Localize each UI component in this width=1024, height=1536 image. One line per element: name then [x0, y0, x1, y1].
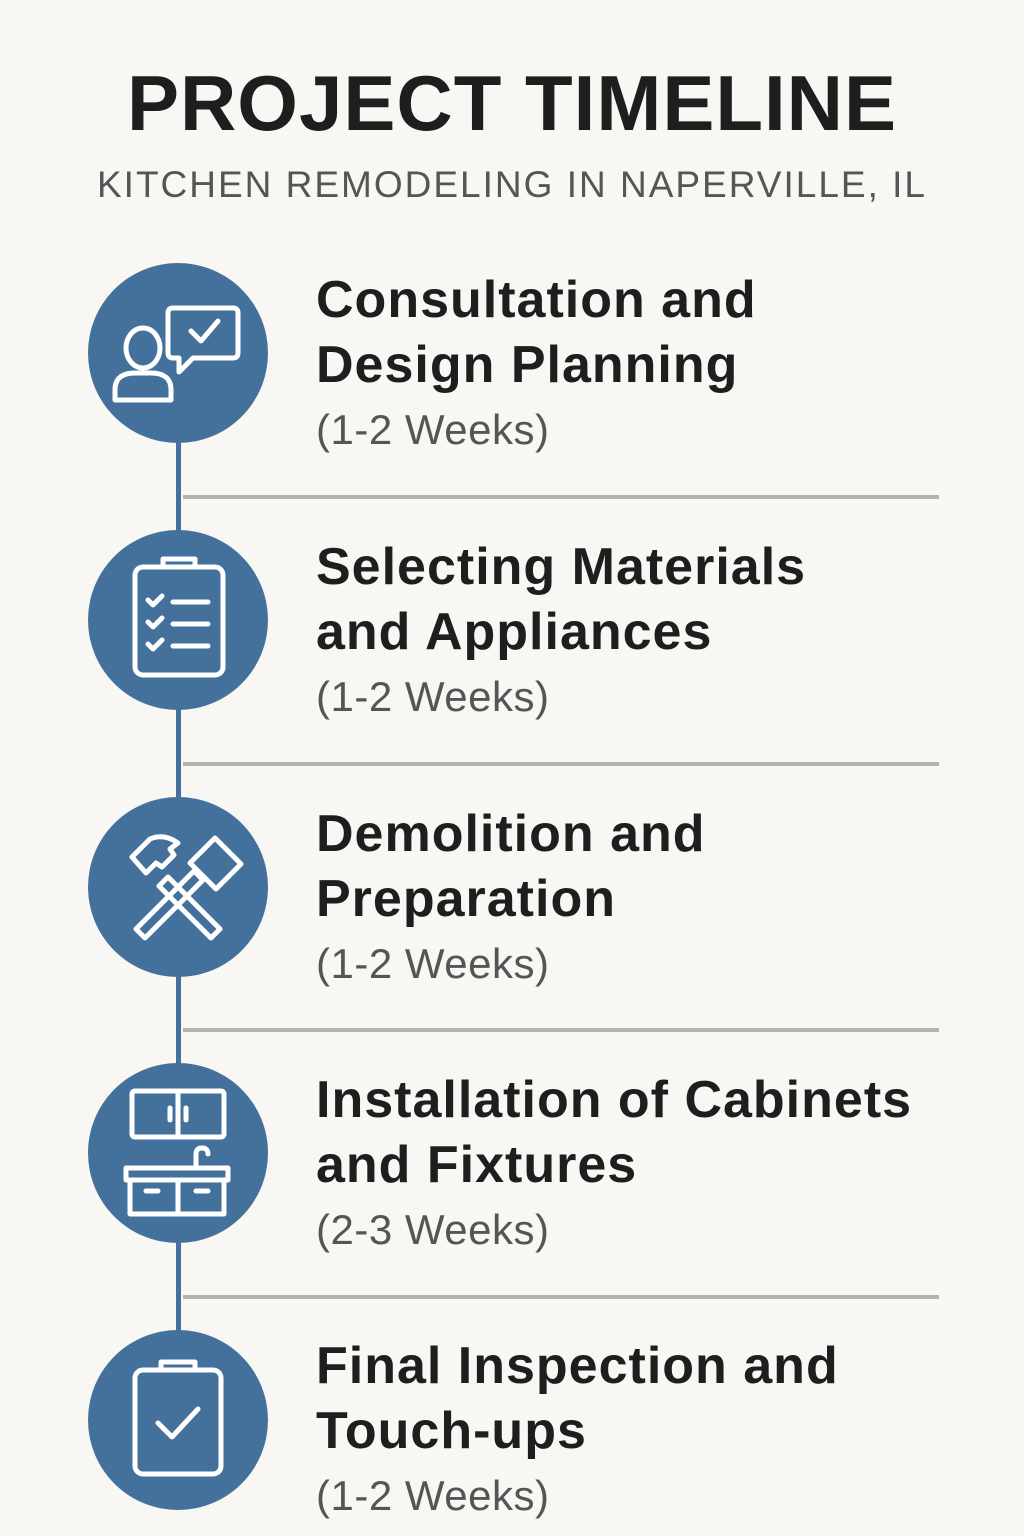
step 4 text: and Fixtures: [316, 1136, 637, 1194]
icon: hammers: [88, 797, 268, 977]
step 3 text: (1-2 Weeks): [316, 940, 549, 987]
step 2 text: and Appliances: [316, 603, 712, 661]
step 1 text: [316, 271, 757, 453]
step 2 text: Selecting Materials: [316, 538, 806, 596]
step 5 text: (1-2 Weeks): [316, 1472, 549, 1519]
step 5 text: [316, 1337, 839, 1519]
step 5 text: Touch-ups: [316, 1402, 587, 1460]
subtitle: KITCHEN REMODELING IN NAPERVILLE, IL: [97, 164, 927, 205]
step 3 text: Demolition and: [316, 805, 706, 863]
step 4 text: Installation of Cabinets: [316, 1071, 912, 1129]
step 1 text: Consultation and: [316, 271, 757, 329]
step 4 text: (2-3 Weeks): [316, 1206, 549, 1253]
step 2 text: [316, 538, 806, 720]
step 5 text: Final Inspection and: [316, 1337, 839, 1395]
icon: clipboard check: [88, 1330, 268, 1510]
icon: cabinets: [88, 1063, 268, 1243]
step 1 text: Design Planning: [316, 336, 738, 394]
icon: consultation: [88, 263, 268, 443]
step 4 text: [316, 1071, 912, 1253]
step 3 text: [316, 805, 706, 987]
title: PROJECT TIMELINE: [127, 59, 897, 147]
step 1 text: (1-2 Weeks): [316, 406, 549, 453]
step 3 text: Preparation: [316, 870, 616, 928]
icon: checklist: [88, 530, 268, 710]
timeline vertical line: [176, 353, 181, 1420]
step 2 text: (1-2 Weeks): [316, 673, 549, 720]
